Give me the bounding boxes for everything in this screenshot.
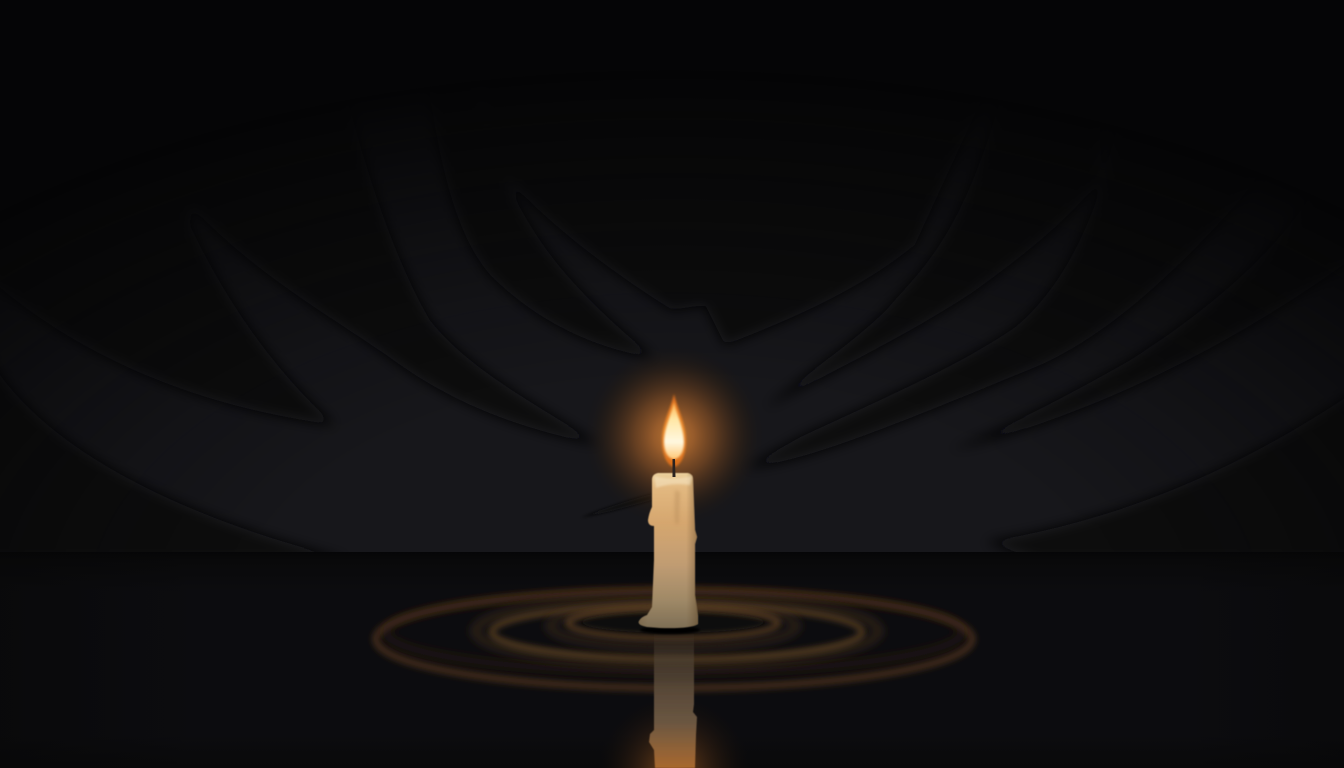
ring: middle ghost <box>475 598 879 664</box>
crease: thin line left of candle <box>588 497 646 516</box>
flame halo <box>584 346 764 526</box>
candle body <box>639 473 698 628</box>
dark pool inside inner ring <box>581 611 765 633</box>
ring: outer ghost <box>386 592 962 672</box>
reflection glow <box>598 696 750 768</box>
crease: lower right <box>995 422 1344 552</box>
fold: lit cloth base <box>4 189 1344 552</box>
candle shadow <box>640 626 700 634</box>
fold creases: dark gaps between folds <box>0 220 1344 552</box>
background wall <box>0 0 1344 552</box>
flame <box>662 394 686 477</box>
flame inner <box>664 402 684 459</box>
candle <box>639 473 700 634</box>
ripple rings <box>376 590 972 688</box>
scene: candle in dark room <box>12 198 1344 768</box>
crease: left outer <box>118 302 328 425</box>
ring: inner ghost <box>549 605 797 647</box>
body shading <box>639 473 698 628</box>
flame outer <box>662 394 686 467</box>
drapery folds <box>12 198 1344 552</box>
ring: outer <box>376 590 972 688</box>
floor <box>0 552 1344 768</box>
crease: right outer <box>982 336 1198 441</box>
crease: right inner <box>786 249 1009 394</box>
crease: top centre <box>568 220 902 345</box>
ring: inner <box>568 608 778 638</box>
crease: right middle <box>757 280 1118 467</box>
crease: left inner <box>473 228 646 358</box>
wax drip <box>674 490 680 524</box>
wick <box>672 459 676 477</box>
floor side shading <box>0 552 1344 768</box>
candle reflection <box>649 634 697 768</box>
crease: below left outer fold <box>0 421 324 552</box>
top melt pool <box>654 476 692 488</box>
ring: middle <box>492 605 862 659</box>
crease: left middle <box>281 251 588 442</box>
